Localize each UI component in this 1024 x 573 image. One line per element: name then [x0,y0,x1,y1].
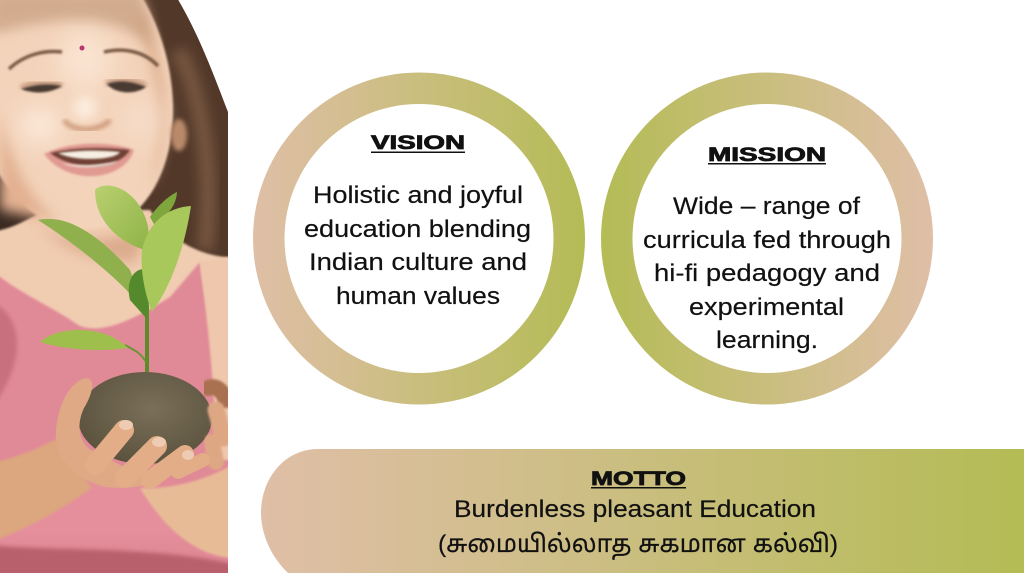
mouth [44,144,134,176]
leaves [38,186,191,350]
soil ball [78,372,212,464]
right forearm [140,466,228,558]
heading: mission: MISSION [708,145,826,166]
nose [64,120,110,129]
text: vision statement [304,182,531,310]
right shoulder [200,256,228,461]
dress [0,262,240,573]
right hand fingers [208,387,226,462]
text: motto english: Burdenless pleasant Education [454,496,816,523]
heading: vision [371,133,465,154]
text: vision statement: Indian culture and [309,249,527,276]
eyes [21,83,62,88]
text: mission statement [643,193,891,354]
text: vision statement: human values [336,283,500,310]
face [0,0,173,229]
text: mission statement: experimental [689,294,844,321]
ear [171,119,187,151]
left arm [0,438,92,542]
heading: vision: VISION [371,133,465,154]
eyebrows [9,52,62,69]
stem [145,305,149,372]
heading: motto: MOTTO [591,469,686,490]
photo: smiling girl holding a seedling [0,0,240,573]
text: vision statement: education blending [304,216,531,243]
chest skin [0,208,228,330]
text: mission statement: learning. [716,327,818,354]
text: motto tamil: (சுமையில்லாத சுகமான கல்வி) [438,531,838,560]
text: mission statement: Wide – range of [673,193,860,220]
panel: motto banner [261,449,1024,573]
text: vision statement: Holistic and joyful [313,182,523,209]
text: mission statement: hi-fi pedagogy and [654,260,880,287]
panel: mission ring [601,72,933,404]
heading: mission [708,145,826,166]
hair [0,0,228,268]
text: mission statement: curricula fed through [643,227,891,254]
bindi [80,46,84,50]
left hand and fingers [56,378,203,488]
panel: vision ring [253,72,585,404]
